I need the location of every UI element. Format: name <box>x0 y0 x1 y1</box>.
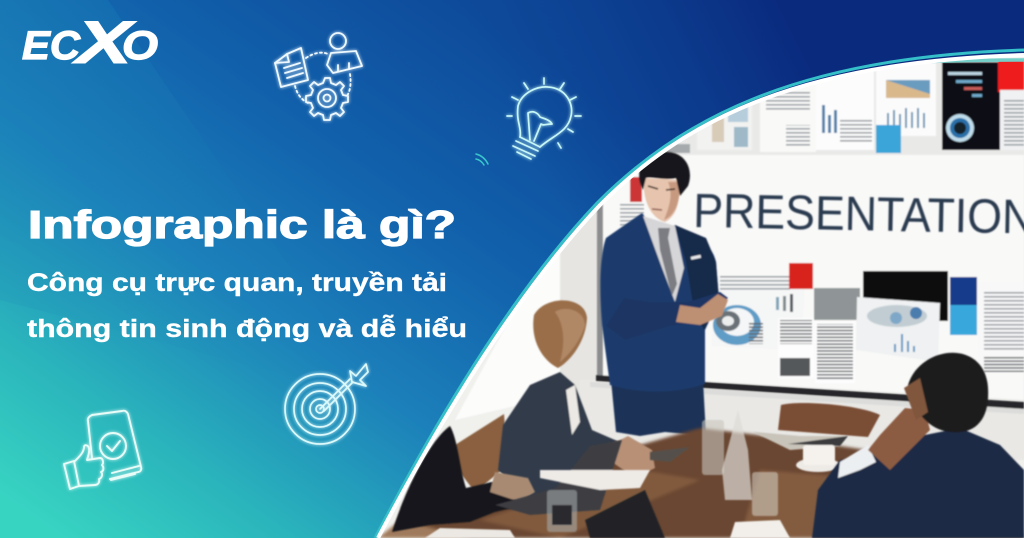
icon: phone with thumbs up <box>64 411 141 489</box>
pale teal band along top edge <box>931 58 1024 64</box>
subheading: Công cụ trực quan, truyền tải <box>27 269 447 297</box>
logo: ECXO: X <box>72 9 138 76</box>
seated woman <box>498 300 655 500</box>
hair <box>639 152 690 196</box>
presentation board <box>590 60 1024 414</box>
meeting table <box>378 428 1024 538</box>
curved border <box>375 50 1024 538</box>
table items: laptops, papers, glasses <box>425 410 848 538</box>
room wall and window <box>370 50 1024 538</box>
photo: meeting room presentation <box>370 50 1024 538</box>
icon: target with arrow <box>285 364 368 444</box>
presenter <box>600 152 728 436</box>
icon: small signal arcs <box>476 154 488 165</box>
heading: Infographic là gì? <box>28 204 456 247</box>
subheading <box>27 269 467 343</box>
hands <box>676 294 728 325</box>
black infographic poster <box>942 60 1024 150</box>
logo: ECXO: EC <box>22 24 81 68</box>
trousers <box>611 380 706 436</box>
suit jacket <box>600 213 719 392</box>
foreground person left <box>392 426 535 532</box>
logo: ECXO: O <box>122 24 158 68</box>
top row documents <box>697 62 936 153</box>
lower row documents <box>711 263 1024 383</box>
icon: light bulb <box>507 78 581 159</box>
icon: document, person and gear <box>275 33 362 120</box>
seated man right <box>812 353 1024 538</box>
logo: ECXO <box>22 9 158 76</box>
subheading: thông tin sinh động và dễ hiểu <box>27 313 467 343</box>
chairs <box>455 403 880 492</box>
shirt and tie <box>643 216 684 302</box>
face <box>644 178 680 222</box>
